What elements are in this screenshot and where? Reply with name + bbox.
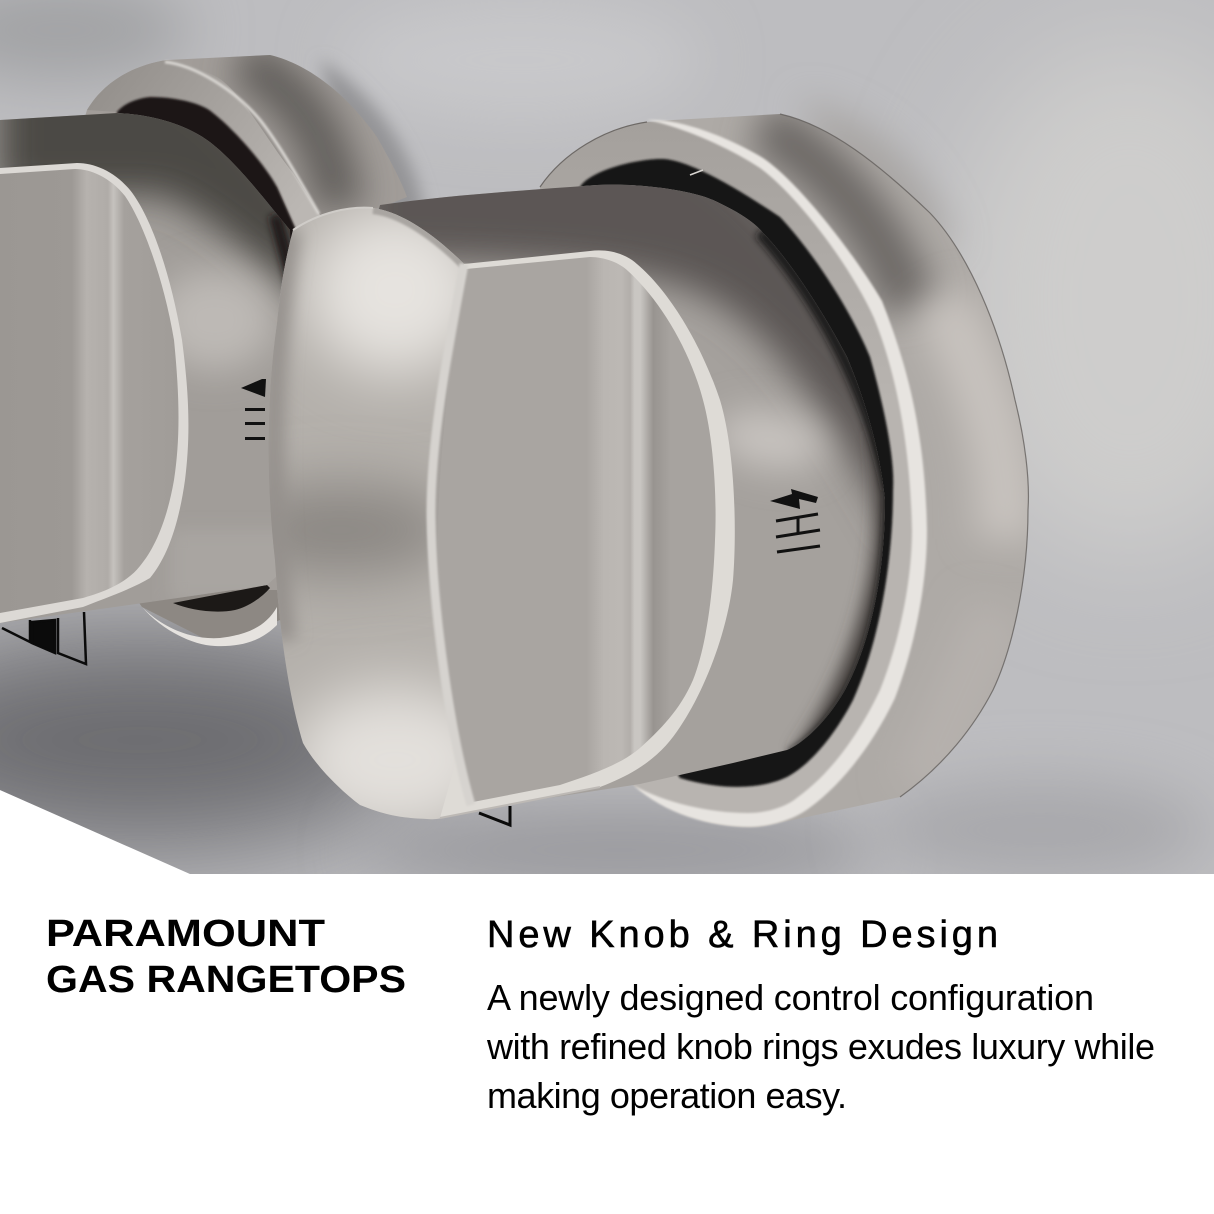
small black panel marks, left: [2, 612, 86, 664]
right knob grip face: [431, 250, 735, 818]
heading: product line: [46, 913, 406, 1001]
right knob grip lobe: [269, 206, 464, 820]
left knob grip face: [0, 163, 188, 623]
description text: A newly designed control configuration: [487, 977, 1094, 1018]
small black panel mark, centre: [479, 806, 510, 825]
product photo: knobs on steel panel: [0, 0, 1214, 900]
description text: with refined knob rings exudes luxury while: [486, 1026, 1155, 1067]
steel panel background: [0, 0, 1214, 900]
left knob stem: [0, 113, 290, 622]
left knob label: [241, 379, 266, 440]
heading: product line: GAS RANGETOPS: [46, 959, 406, 1001]
ring front lip: [540, 120, 927, 827]
recess light glint: [690, 170, 703, 175]
heading: product line: PARAMOUNT: [46, 913, 325, 955]
embossed HI label with flame bolt: [770, 489, 820, 552]
description text: making operation easy.: [487, 1075, 847, 1116]
right knob stem: [379, 184, 885, 798]
right knob ring outer body: [650, 113, 1029, 819]
description text: [486, 977, 1155, 1116]
ring dark recess: [579, 157, 895, 788]
subheading: feature title: New Knob & Ring Design: [487, 914, 998, 956]
left knob ring: [86, 55, 407, 646]
